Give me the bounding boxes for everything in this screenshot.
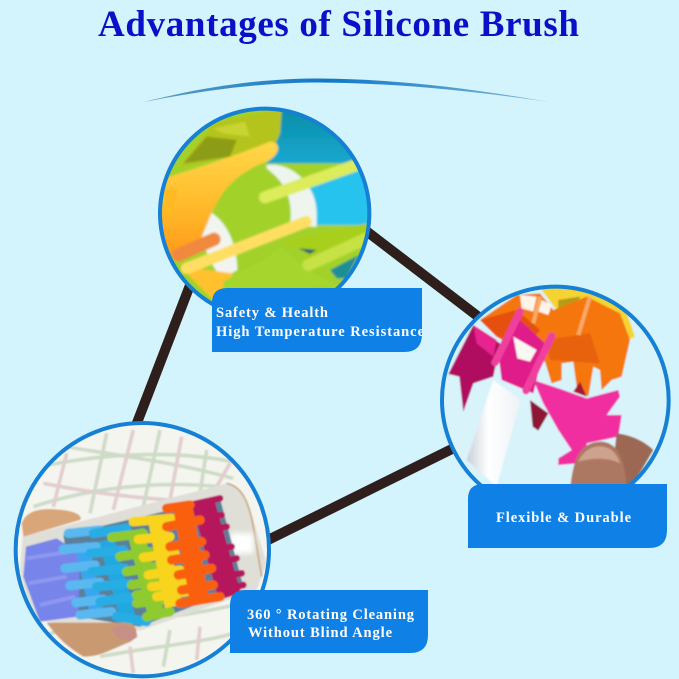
label: safety and health: Safety & Health [216,305,328,321]
brush dark base [63,498,243,627]
yellow column [157,520,173,607]
label: 360 rotating cleaning: Without Blind Angle [248,625,393,641]
label: flexible and durable [468,484,667,548]
yellow bristles behind [540,288,636,340]
label: safety and health [212,288,425,352]
white handle [467,380,521,487]
bottom hand [47,623,137,657]
label: 360 rotating cleaning [230,590,428,653]
circle photo: top brush closeup [157,107,373,320]
cyan column [107,540,128,620]
blue column [82,543,97,613]
title: Advantages of Silicone Brush [98,4,579,45]
label: flexible and durable: Flexible & Durable [496,510,632,526]
orange bristles [480,293,630,397]
circle photo: jar with rainbow brush [13,420,273,679]
pink hub [498,320,545,393]
label: 360 rotating cleaning: 360 ° Rotating Cleaning [247,607,415,623]
circle photo: bending pink brush [440,284,671,485]
orange column [183,510,200,603]
label: safety and health: High Temperature Resistance [216,324,425,340]
dark magenta petals [448,325,500,412]
connector triangle lines [135,230,480,541]
magenta column [203,503,230,597]
purple brush section [23,538,80,622]
fabric plaid pattern [33,430,253,673]
top hand [22,509,81,537]
fingers [614,432,654,484]
decorative arc under title [144,78,549,102]
jar [20,483,267,631]
pink fin [533,380,622,465]
green column [135,530,157,617]
